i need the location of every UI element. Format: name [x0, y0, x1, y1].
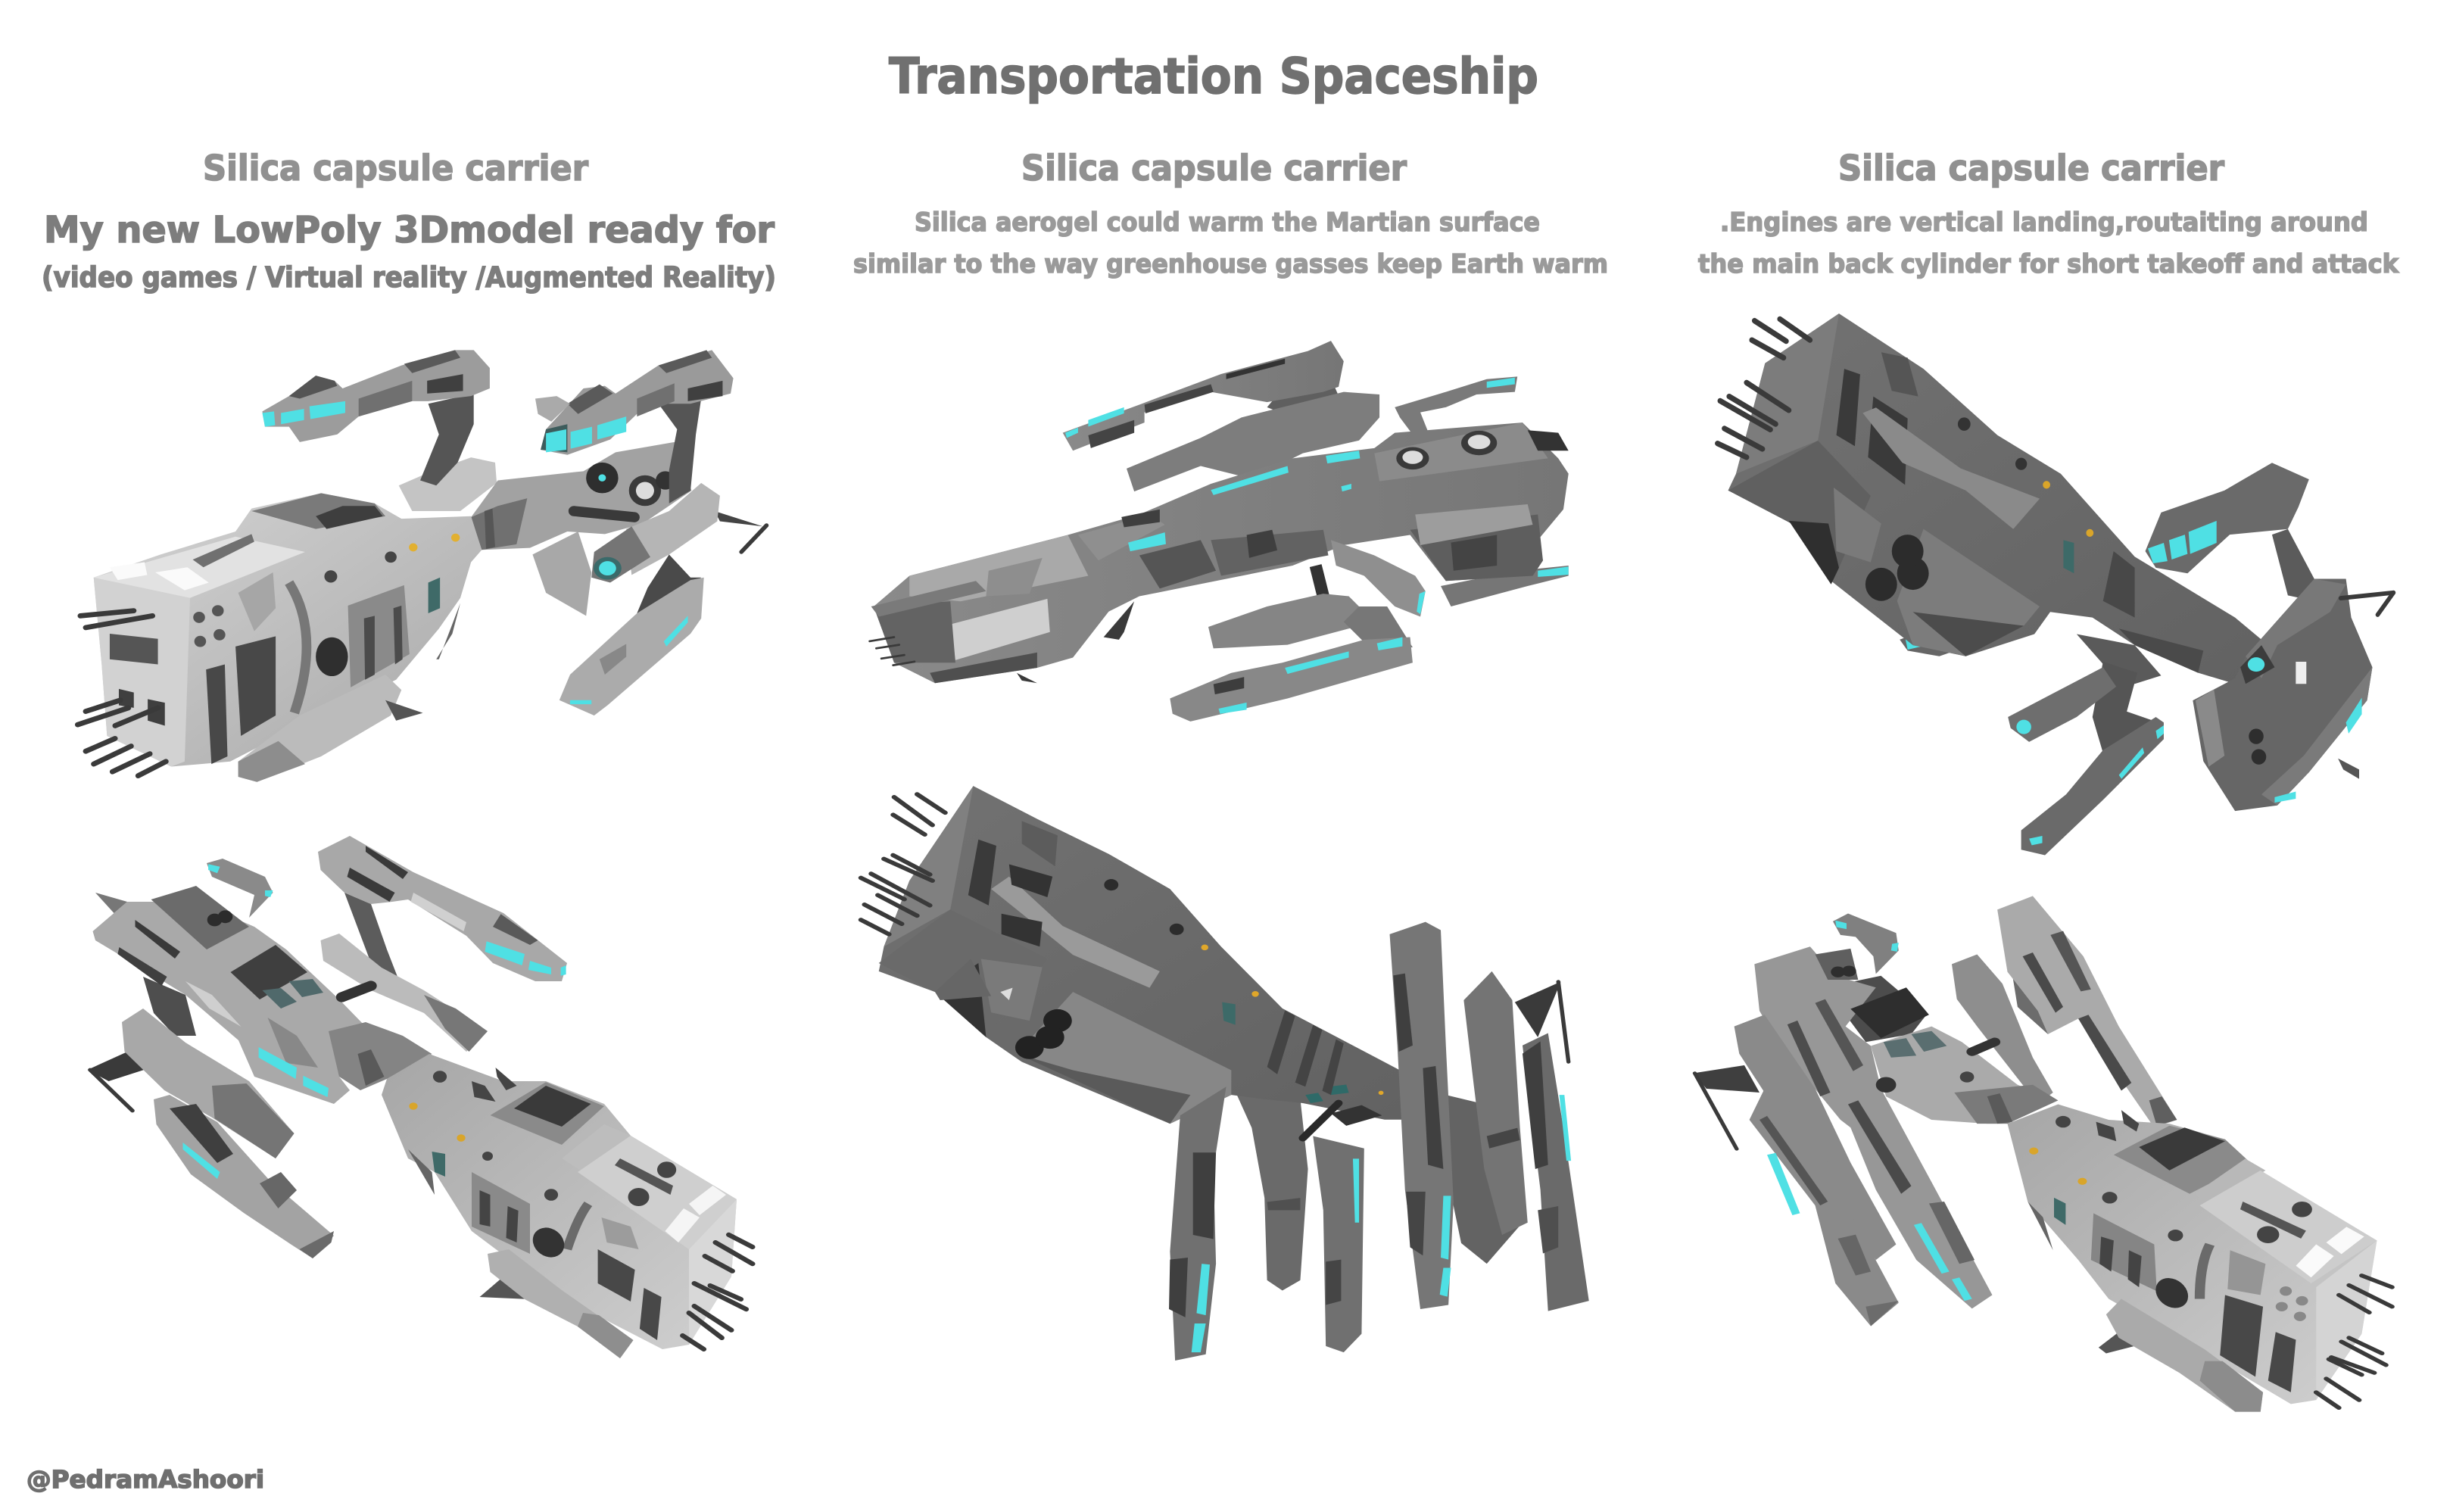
author credit: @PedramAshoori	[26, 1465, 264, 1494]
hull side cylinder	[2099, 1299, 2263, 1412]
upper right engine pod and mid section	[471, 350, 734, 550]
column 1 caption: (video games / Virtual reality /Augmented Reality)	[42, 261, 776, 294]
rear pods behind hull	[1231, 971, 1589, 1352]
front barrels	[861, 794, 945, 934]
lower engine pod	[154, 1095, 334, 1258]
column 3 heading: Silica capsule carrier	[1838, 148, 2224, 189]
lower arm and cylinder	[1208, 540, 1426, 648]
lower engine pods	[2008, 634, 2164, 856]
right rear cluster	[2193, 578, 2393, 811]
front section and main pod	[1754, 946, 1992, 1308]
front barrels	[683, 1235, 753, 1349]
lower engine pod	[559, 554, 704, 715]
main hull	[329, 1022, 737, 1349]
front weapon barrels	[78, 611, 166, 776]
column 1 subheading: My new LowPoly 3Dmodel ready for	[44, 209, 775, 251]
right cylinder strut	[342, 986, 371, 997]
far small pod	[1900, 623, 1971, 656]
lower engine pod	[1170, 606, 1413, 722]
neck and forward deck	[1871, 1027, 2058, 1124]
top engine pods	[1952, 896, 2177, 1127]
main hull	[1728, 313, 2261, 684]
column 2 description line 1: Silica aerogel could warm the Martian surface	[915, 207, 1540, 238]
small far engine pods	[1395, 376, 1569, 606]
centre-right engine pod	[1390, 922, 1454, 1309]
spaceship: top-left front three-quarter view	[78, 350, 766, 782]
front barrels	[870, 638, 915, 666]
top engine pod	[318, 836, 567, 1052]
main hull	[2008, 1104, 2377, 1404]
far small pod	[207, 859, 273, 918]
far small pod	[1833, 914, 1899, 974]
main hull	[94, 493, 482, 766]
column 2 heading: Silica capsule carrier	[1021, 148, 1407, 189]
front barrels	[1718, 319, 1810, 457]
column 2 description line 2: similar to the way greenhouse gasses keep Earth warm	[853, 249, 1608, 279]
lower left engine cylinder	[88, 1009, 294, 1158]
upper left engine pod	[262, 350, 497, 511]
hull side cylinder	[238, 675, 423, 782]
upper engine pod	[2146, 463, 2314, 601]
front barrels	[2316, 1276, 2392, 1408]
rear engine cylinder and fin	[574, 483, 766, 583]
title: Transportation Spaceship	[889, 48, 1538, 105]
spaceship: top-right underside view	[1718, 313, 2393, 856]
hull side cylinder	[480, 1249, 633, 1358]
left front section	[92, 886, 366, 1104]
column 3 description line 2: the main back cylinder for short takeoff and attack	[1698, 249, 2399, 279]
spaceship: bottom-right top view	[1694, 896, 2392, 1412]
main hull	[879, 786, 1402, 1138]
spaceship: bottom-centre underside view	[861, 786, 1589, 1361]
main hull	[871, 422, 1569, 683]
left engine pod	[1169, 1086, 1226, 1361]
column 3 description line 1: .Engines are vertical landing,routaiting around	[1720, 207, 2368, 238]
under fin	[532, 532, 591, 616]
spaceship: bottom-left top view	[88, 836, 753, 1358]
spaceship: top-centre lower side view	[870, 341, 1569, 722]
upper cylinder	[1127, 392, 1379, 491]
top engine pod	[1063, 341, 1344, 450]
column 1 heading: Silica capsule carrier	[203, 148, 588, 189]
left cylinder and fin	[1694, 1015, 1899, 1326]
